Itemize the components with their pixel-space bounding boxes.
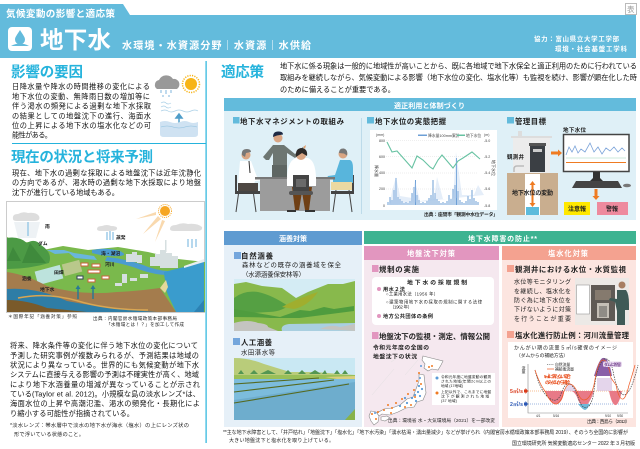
causes text: の結果としての地盤沈下の進行、海面水 [12,112,151,120]
illustration: observation well and monitor: 観測井 [507,153,524,161]
cooperation credit: 協力：富山県立大学工学部 [534,34,620,43]
causes text: 能性がある。 [12,130,52,140]
illustration: well room [575,278,629,325]
footnote: freshwater lens: 形で浮いている状態のこと。 [14,430,84,438]
adaptation intro text: 取組みを継続しながら、気候変動による影響（地下水位の変化、塩水化等）も監視を続け、影響が顕在化した時 [280,73,637,82]
adaptation intro text: のために備えることが重要である。 [280,85,395,94]
chart: groundwater level and rainfall: (mm) [376,133,384,137]
heading: causes: 影響の要因 [11,63,83,81]
footnote: freshwater lens [10,421,189,438]
map legend: 上記以外で、これまでに地盤 [441,389,491,394]
monitoring text [514,278,571,323]
subheading: management targets: 管理目標 [515,117,547,126]
future projection text: 将来、降水条件等の変化に伴う地下水位の変化について [10,341,198,350]
monitoring text: 下げないように対策 [514,306,571,314]
lake and river [47,250,97,260]
chart source: 出典：西島ら（2013） [587,418,630,425]
illustration: water cycle landscape: 地下水 [40,286,55,293]
map legend [432,373,495,405]
subheading: well monitoring: 観測井における水位・水質監視 [515,265,627,274]
land [7,237,205,312]
illustration: water cycle landscape: 河川 [105,261,115,268]
page title: 地下水 [40,27,112,53]
panel: land subsidence [364,246,499,427]
illustration: water cycle landscape: 蒸発 [116,234,126,241]
subsidence header text: 地盤沈下対策 [407,249,456,258]
map legend: (37 地域) [441,398,457,403]
chart: groundwater level and rainfall: (m) [484,133,489,137]
illustration: water cycle landscape: 海・湖沼 [101,250,120,257]
future projection text: システムに直接与える影響の予測は不確実性が高く、地域 [10,370,199,379]
chart: river flow and dam supply: 9/10 [605,414,611,418]
chart: river flow and dam supply: 2㎥/s [510,400,523,408]
icon: rain, sun and rising sea [155,75,200,137]
status text: の方向であるが、渇水時の過剰な地下水採取により地盤 [12,178,201,187]
chart: groundwater level and rainfall [370,130,497,210]
chart: groundwater level and rainfall: 600 [379,155,385,159]
footnote: groundwater problems: 大きい地盤沈下と塩水化を取り上げている。 [229,437,334,444]
illustration: water cycle landscape: 雨 [45,224,50,230]
regulation box: 地下水の採取規制 [407,278,467,286]
panel: preventing groundwater problems [364,231,638,427]
illustration: water cycle landscape: 田畑 [54,269,64,276]
chart: river flow and dam supply: 9/30 [617,414,623,418]
publisher credit: 国立環境研究所 気候変動適応センター 2022 年 3 月初版 [512,440,635,447]
chart: groundwater level and rainfall: -5.2 [484,155,490,159]
adaptation intro text [280,62,637,94]
chart: river flow and dam supply: 5㎥/s [510,387,523,395]
subheading: regulation: 規制の実施 [379,265,420,274]
map legend: された地域(年間2cm以上の [441,378,491,384]
subheading: groundwater management: 地下水マネジメントの取組み [240,117,345,126]
panel: recharge measures [224,231,362,427]
causes text: 日降水量や降水の時間推移の変化による [12,82,150,91]
recharge header text: 涵養対策 [279,234,307,243]
regulation box: ○建築物用地下水の採取の規制に関する法律 [386,298,483,306]
map caption: 令和元年度の全国の [373,344,429,352]
future projection text: 予測した研究事例が複数みられるが、予測結果は地域の [10,351,199,360]
panel: current status and outlook [6,148,205,328]
status text: 沈下が進行している地域もある。 [12,188,119,197]
illustration: observation well and monitor: 警報 [606,205,618,213]
regulation box [372,277,494,325]
image source [93,315,184,328]
image note: ＊国際年記「涵養対策」参照 [8,313,77,320]
sector subtitle: 水環境・水資源分野｜水資源｜水供給 [122,39,311,52]
chart: groundwater level and rainfall: -5.8 [484,204,490,208]
image source: 「水循環とは！？」を加工して作成 [106,321,184,328]
chart: groundwater level and rainfall: -5.4 [484,171,490,175]
natural recharge text: （水源涵養保安林等） [242,270,305,278]
map legend: 地域 (17地域) [441,383,463,388]
map: japan subsidence locations [369,354,443,425]
status text: 現在、地下水の過剰な採取による地盤沈下は近年沈静化 [12,168,201,178]
natural recharge text: 森林などの既存の涵養域を保全 [242,260,342,269]
subheading: groundwater monitoring: 地下水位の実態把握 [375,117,447,126]
icon: water drop [8,27,32,51]
causes text: 地下水位の変動、無降雨日数の増加等に [12,92,150,101]
illustration: forest [234,279,355,331]
illustration: water cycle landscape [6,202,205,312]
regulation box: ○工業用水法（1956 年） [386,290,438,298]
chart: groundwater level and rainfall: 降水量 [374,165,380,177]
panel: saltwater intrusion [502,246,638,427]
illustration: observation well and monitor: 地下水位 [563,126,586,134]
chart: groundwater level and rainfall: 0 [383,204,385,208]
map caption: 地盤沈下の状況 [373,352,417,360]
badge [626,4,636,14]
monitoring text: を行うことが重要 [514,315,571,323]
causes text [12,82,152,140]
map legend: 令和元年度に地盤変動の観測 [441,374,491,379]
illustration: water cycle landscape: 涵養 [22,275,32,282]
header band [0,4,636,58]
illustration: observation well and monitor [507,126,631,215]
future projection text [10,341,200,418]
future projection text: ている(Taylor et al. 2012)。小規模な島の淡水レンズ*は、 [10,390,200,398]
chart: river flow and dam supply: 補給後流量 [555,366,574,372]
status text [12,168,201,197]
chart: groundwater level and rainfall: 降水量100mm累計 [428,133,460,138]
image source: 出典：内閣官房水循環政策本部事務局 [93,315,177,322]
chart: groundwater level and rainfall: 地下水位 [466,133,481,138]
column divider [206,61,207,443]
chart: river flow and dam supply: 流量 [521,365,526,374]
subheading: river flow management: 塩水化進行防止例：河川流量管理 [515,331,630,340]
monitoring text: 防ぐ為に地下水位を [514,296,571,304]
illustration: flooded paddy [234,358,355,420]
illustration: water cycle landscape: ダム [38,240,48,247]
footnote: groundwater problems [223,429,628,444]
illustration: observation well and monitor: 注意報 [568,205,586,213]
chart: river flow and dam supply: 4/1 [536,414,541,418]
subheading: monitoring and disclosure: 地盤沈下の監視・測定、情報公開 [379,332,490,341]
chart source: 出典：座間市「観測中水位データ」 [424,211,498,218]
causes text: 伴う渇水の頻発による過剰な地下水採取 [12,102,152,110]
regulation box: （1962 年） [390,304,412,310]
chart: groundwater level and rainfall: 800 [379,139,385,143]
subheading: natural recharge: 自然涵養 [241,252,274,260]
monitoring text: 水位等モニタリング [514,278,571,286]
chart: river flow and dam supply: かんがい期の流量５㎥/s確保のイメージ [514,344,617,352]
chart: groundwater level and rainfall: 400 [379,171,385,175]
illustration: observation well and monitor: 地下水位の変動 [512,189,553,197]
series title: 気候変動の影響と適応策 [6,8,115,20]
rainfall bars [388,158,478,205]
illustration: meeting [235,131,354,212]
chart: groundwater level and rainfall: -5.6 [484,187,490,191]
saltwater header text: 塩水化対策 [548,249,589,258]
future projection text: により地下水涵養量の増減が異なっていることが示され [10,380,200,389]
chart: groundwater level and rainfall: -5.0 [484,139,490,143]
heading: adaptation: 適応策 [221,63,264,81]
chart: river flow and dam supply: ダムに貯留 [604,361,621,367]
panel: causes [11,63,200,140]
adaptation intro text: 地下水に係る現象は一般的に地域性が高いことから、既に各地域で地下水保全と適正利用のために行われている [280,62,637,70]
sea [164,260,204,312]
chart: river flow and dam supply: （ダムからの補給方法） [516,352,568,359]
cooperation credit: 環境・社会基盤工学科 [555,44,628,53]
map source: 出典：環境省 水・大気環境局（2021）を一部改変 [388,417,495,424]
chart: groundwater level and rainfall: 地下水位 [491,160,497,176]
chart: groundwater level and rainfall: 200 [379,187,385,191]
green header text: 地下水障害の防止** [468,234,537,243]
monitoring text: を継続し、塩水化を [514,288,571,296]
artificial recharge text: 水田湛水等 [241,348,276,356]
panel: proper use and systems [224,98,636,220]
footnote: groundwater problems: **主な地下水障害として、「井戸枯れ」「地盤沈下」「塩水化」「地下水汚染」「湧水枯渇・湧出量減少」などが挙げられ（内閣官房水循環政策本部事務局 2019）、そのうち全国的に影響が [223,429,628,436]
natural recharge text [242,260,342,278]
subheading: artificial recharge: 人工涵養 [241,338,273,347]
soil and groundwater [7,272,176,312]
future projection text: 状況により異なっている。世界的にも気候変動が地下水 [10,360,199,370]
map caption [373,344,429,360]
badge: 表 [627,4,635,14]
panel header text: 適正利用と体制づくり [394,101,465,110]
chart: river flow and dam supply: 5㎥/sに満たない場合 [544,373,571,380]
footnote: freshwater lens: *淡水レンズ：帯水層中で淡水の地下水が海水（塩水）の上にレンズ状の [10,421,189,429]
cooperation credit [534,34,628,53]
chart: river flow and dam supply: 5/16 [553,414,559,418]
map legend: 沈下が観測された地域 [441,394,489,398]
future projection text: り縮小する可能性が指摘されている。 [10,409,134,418]
chart: river flow and dam supply [508,342,638,418]
future projection text: 海面水位の上昇や高潮氾濫、渇水の頻発化・長期化によ [10,399,200,408]
regulation box: 用水２法 [383,285,406,293]
regulation box: 地方公共団体の条例 [383,312,433,320]
causes text: 位の上昇による地下水の塩水化などの可 [12,121,151,130]
chart: river flow and dam supply: のみダムから補給 [545,379,570,386]
chart: river flow and dam supply: 自然流量 [555,362,570,367]
heading: status: 現在の状況と将来予測 [11,148,153,166]
